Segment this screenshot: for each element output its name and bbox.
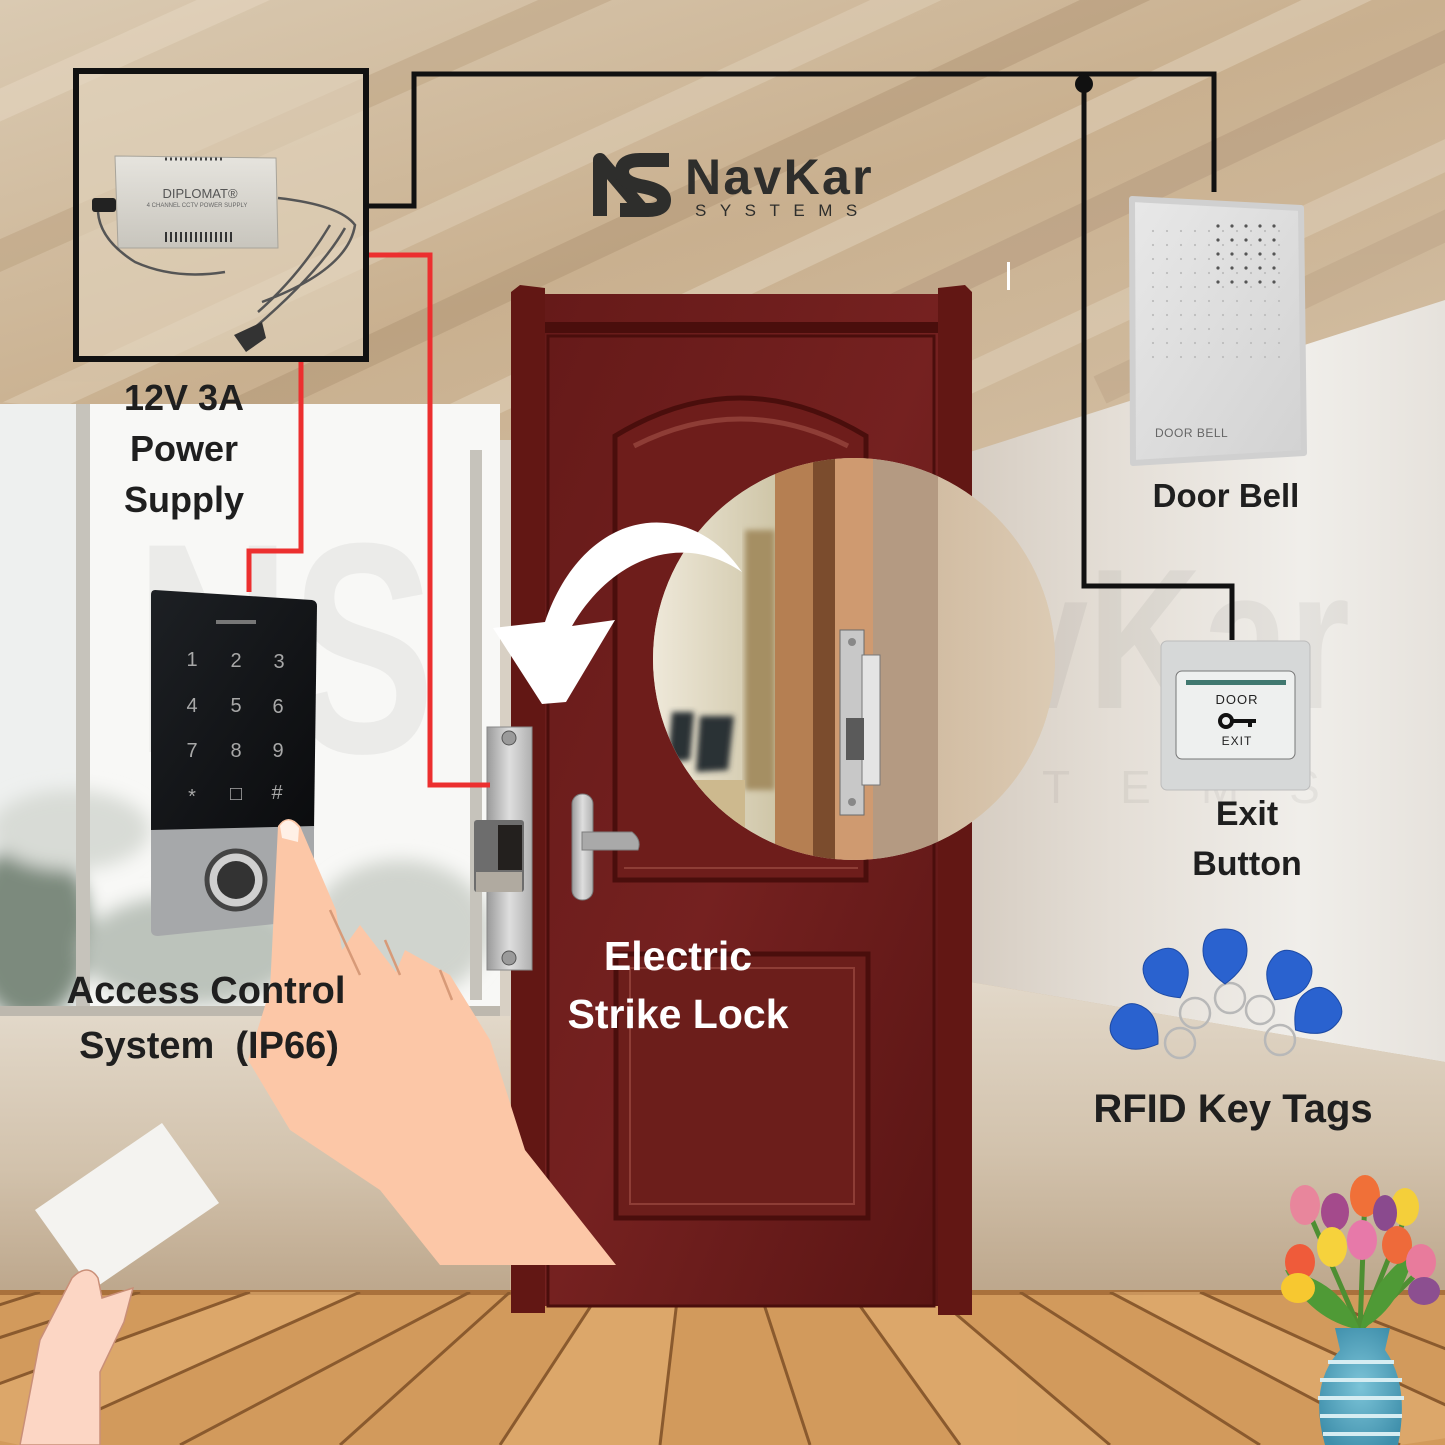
ceiling with wood planks: [0, 0, 1445, 452]
power supply body: DIPLOMAT®: [162, 186, 238, 201]
electric strike lock: [474, 727, 532, 970]
top rail: [545, 322, 938, 333]
white card: [35, 1123, 219, 1290]
tulips: [1281, 1175, 1440, 1305]
black wiring: [366, 74, 1232, 640]
label: power supply: Power: [130, 428, 238, 469]
right wall: [970, 300, 1445, 1062]
label: RFID key tags: RFID Key Tags: [1093, 1087, 1373, 1131]
keypad: 3: [273, 651, 285, 673]
watermark logo: [135, 480, 1370, 816]
power plug: [234, 322, 266, 352]
logo: NavKar Systems: [600, 149, 874, 220]
keypad: [151, 590, 317, 936]
beige floor: [0, 1016, 510, 1292]
keypad: 9: [272, 740, 284, 762]
label: access control: [67, 970, 345, 1067]
small wall mark: [1007, 262, 1010, 290]
vase: [1319, 1328, 1402, 1445]
exit button: DOOR: [1216, 692, 1258, 707]
magnifier circle: [650, 450, 1058, 870]
door leaf: [545, 294, 938, 1306]
label: power supply: 12V 3A: [124, 377, 244, 418]
door: [511, 285, 972, 1315]
logo mark: [600, 160, 669, 216]
exit button: EXIT: [1222, 734, 1252, 748]
flower vase: [1281, 1175, 1440, 1445]
label: power supply: Supply: [124, 479, 244, 520]
door bell: [1132, 199, 1304, 463]
exit button: [1161, 641, 1310, 790]
label: access control: Access Control: [67, 970, 345, 1012]
window: [0, 404, 500, 1020]
lower panel: [616, 954, 868, 1218]
keypad: 4: [186, 695, 198, 717]
keypad: 6: [272, 696, 284, 718]
upper arched panel: [615, 398, 866, 880]
red wiring: [249, 255, 490, 785]
door handle: [572, 794, 639, 900]
keypad: 2: [230, 650, 242, 672]
curved white arrow: [493, 523, 742, 704]
label: electric strike lock: Electric: [604, 933, 752, 979]
label: exit button: Button: [1192, 845, 1302, 883]
label: access control: System (IP66): [79, 1025, 339, 1067]
keypad: 8: [230, 740, 242, 762]
stems and leaves: [1300, 1195, 1425, 1330]
label: electric strike lock: Strike Lock: [567, 991, 789, 1037]
wooden floor: [0, 1290, 1445, 1445]
RFID key tags: [1103, 929, 1350, 1062]
keypad: □: [230, 783, 242, 805]
hand holding card: [20, 1123, 219, 1445]
door frame: [511, 285, 972, 1315]
icon: key: [1220, 715, 1256, 727]
left wall strip: [480, 440, 520, 1020]
keypad: 7: [186, 740, 198, 762]
panel: power supply: [76, 71, 366, 359]
hand: [20, 1270, 133, 1445]
watermark logo: NS: [135, 480, 435, 816]
label: exit button: Exit: [1216, 795, 1278, 833]
label: electric strike lock: [567, 933, 789, 1037]
door bell: DOOR BELL: [1155, 426, 1228, 440]
logo: NavKar Systems: SYSTEMS: [695, 201, 871, 220]
power supply body: 4 CHANNEL CCTV POWER SUPPLY: [147, 203, 247, 209]
label: door bell: Door Bell: [1153, 477, 1299, 514]
keypad: 5: [230, 695, 242, 717]
panel outline: [548, 336, 934, 1306]
power supply body: [92, 156, 355, 352]
label: power supply: [124, 377, 244, 520]
logo: NavKar Systems: NavKar: [685, 149, 874, 205]
keypad: #: [271, 782, 283, 804]
pointing hand: [248, 819, 616, 1265]
keypad: 1: [186, 649, 198, 671]
watermark logo: SYSTEMS: [800, 761, 1370, 813]
label: exit button: [1192, 795, 1302, 883]
keypad: *: [188, 786, 196, 808]
